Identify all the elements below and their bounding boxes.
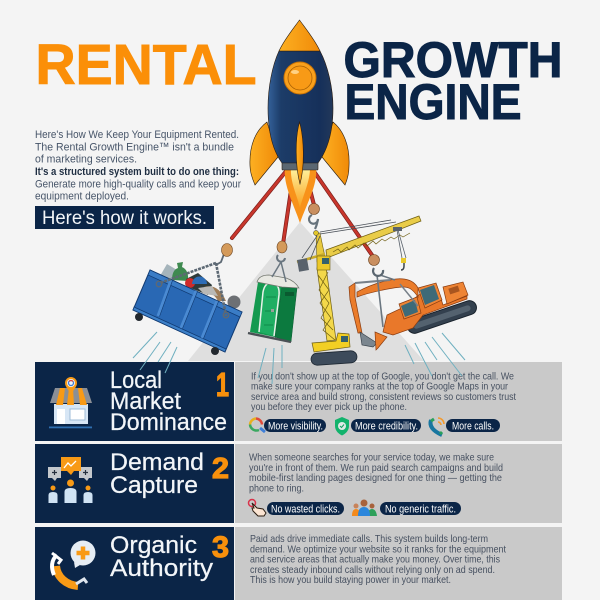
body text row 2: When someone searches for your service today, we make sure bbox=[249, 453, 494, 464]
illustration: tower crane bbox=[297, 204, 421, 366]
icon: hand clicking bbox=[248, 500, 266, 516]
heading: Local Market Dominance: Market bbox=[110, 388, 181, 415]
bucket bbox=[360, 332, 377, 347]
intro text block: of marketing services. bbox=[35, 154, 137, 166]
body text row 2: phone to ring. bbox=[249, 484, 304, 495]
illustration: rocket bbox=[250, 20, 349, 223]
body text row 3: Paid ads drive immediate calls. This system builds long-term bbox=[250, 534, 488, 545]
pill: No generic traffic: No generic traffic. bbox=[385, 504, 456, 516]
cab bbox=[317, 256, 330, 270]
body text row 2: you're in front of them. We run paid search campaigns and build bbox=[249, 463, 503, 474]
speed lines bbox=[133, 332, 465, 384]
body text row 1: If you don't show up at the top of Google, you don't get the call. We bbox=[251, 371, 514, 382]
body text row 3: creates steady inbound calls without relying only on ad spend. bbox=[250, 565, 495, 576]
title: GROWTH ENGINE: ENGINE bbox=[344, 74, 522, 130]
heading: Organic Authority bbox=[110, 532, 213, 582]
pill: More visibility: More visibility. bbox=[268, 420, 323, 432]
body text row 1: make sure your company ranks at the top of Google Maps in your bbox=[251, 382, 509, 393]
heading: Demand Capture: Demand bbox=[110, 449, 204, 476]
panel: row 3 organic authority bbox=[35, 527, 562, 600]
icon: shield bbox=[335, 417, 349, 436]
blade bbox=[375, 332, 387, 350]
cab bbox=[399, 297, 421, 319]
body text row 2 bbox=[249, 453, 503, 495]
body text row 3: demand. We optimize your website so it ranks for the equipment bbox=[250, 544, 506, 555]
intro text block: The Rental Growth Engine™ isn't a bundle bbox=[35, 141, 234, 153]
pill: More calls: More calls. bbox=[452, 420, 494, 432]
icon: people group bbox=[352, 500, 377, 516]
base bbox=[312, 333, 350, 352]
heading: Demand Capture: Capture bbox=[110, 472, 198, 499]
number 2: 2 bbox=[212, 453, 229, 485]
icon: audience with chart bbox=[48, 457, 92, 503]
arm bbox=[357, 279, 418, 297]
panel: row 2 demand capture bbox=[35, 444, 562, 523]
icon: storefront with map pin bbox=[49, 377, 92, 428]
hand bbox=[222, 244, 232, 256]
pill: More credibility: More credibility. bbox=[355, 420, 418, 432]
body text row 2: mobile-first landing pages designed for one thing — getting the bbox=[249, 473, 502, 484]
body text row 1 bbox=[251, 371, 516, 413]
heading: Organic Authority: Organic bbox=[110, 532, 197, 559]
body text row 3: This is how you build staying power in your market. bbox=[250, 575, 451, 586]
icon: magnifier bbox=[250, 418, 265, 432]
body text row 1: you before they ever pick up the phone. bbox=[251, 402, 407, 413]
tracks bbox=[406, 299, 478, 335]
heading: Organic Authority: Authority bbox=[110, 555, 213, 582]
illustration: excavator bbox=[349, 254, 478, 350]
trash bbox=[160, 262, 240, 308]
heading: Local Market Dominance: Local bbox=[110, 367, 162, 394]
body text row 1: service area and build strong, consistent reviews so customers trust bbox=[251, 392, 516, 403]
container bbox=[133, 270, 242, 352]
mast bbox=[317, 267, 336, 341]
rope block and hook bbox=[308, 204, 320, 214]
panel: row 1 local market dominance bbox=[35, 362, 562, 441]
intro text block: Generate more high-quality calls and keep your bbox=[35, 178, 241, 190]
heading: Local Market Dominance: Dominance bbox=[110, 409, 227, 436]
chain and hook bbox=[377, 275, 395, 327]
pill: No wasted clicks: No wasted clicks. bbox=[271, 504, 340, 516]
intro text block bbox=[35, 129, 241, 203]
heading: Demand Capture bbox=[110, 449, 204, 499]
ropes bbox=[232, 170, 372, 255]
title: GROWTH ENGINE: GROWTH bbox=[344, 32, 562, 88]
title: GROWTH ENGINE bbox=[344, 32, 562, 130]
title: RENTAL: RENTAL bbox=[36, 33, 256, 97]
illustration: dumpster with chains bbox=[133, 244, 242, 355]
hook bbox=[272, 262, 286, 282]
chains bbox=[160, 263, 226, 316]
body text row 3 bbox=[250, 534, 506, 586]
rocket flame bbox=[285, 168, 316, 223]
number 1: 1 bbox=[216, 366, 229, 403]
intro text block: equipment deployed. bbox=[35, 191, 129, 203]
intro text block: Here's How We Keep Your Equipment Rented. bbox=[35, 129, 239, 141]
hand bbox=[277, 241, 287, 253]
number 3: 3 bbox=[212, 531, 229, 564]
jib bbox=[326, 216, 421, 258]
heading: Local Market Dominance bbox=[110, 367, 227, 436]
illustration: portable toilet bbox=[248, 241, 299, 342]
hook bbox=[393, 227, 402, 231]
icon: phone with plus bubble bbox=[52, 540, 96, 586]
icon: phone with signal bbox=[430, 418, 444, 435]
intro text block: It's a structured system built to do one thing: bbox=[35, 166, 239, 178]
body text row 3: and service areas that actually make you money. Over time, this bbox=[250, 555, 500, 566]
body bbox=[383, 286, 467, 335]
callout: here's how it works: Here's how it works. bbox=[42, 208, 207, 229]
